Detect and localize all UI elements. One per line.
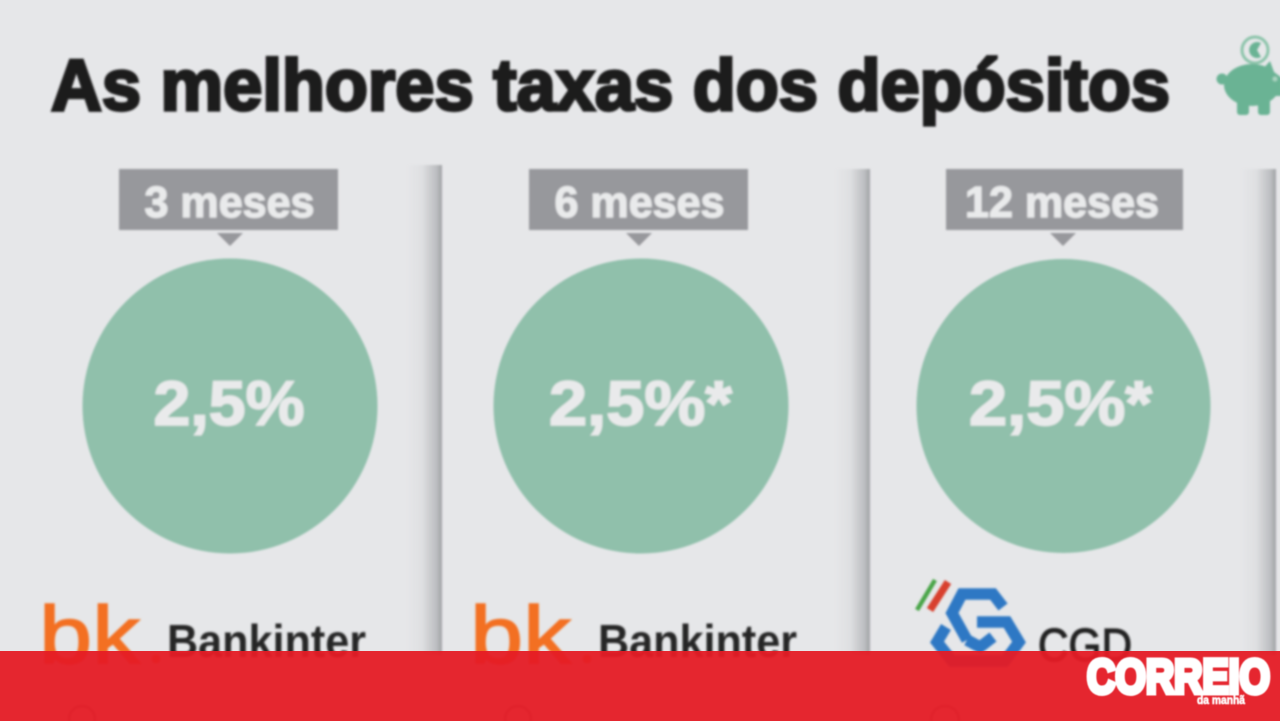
logo: Bankinter: Bankinter: [598, 615, 797, 667]
panel: 6 meses: [470, 169, 797, 681]
rate circle: 2,5%*: 2,5%*: [969, 369, 1153, 439]
period label: 3 meses: 3 meses: [144, 178, 314, 227]
logo: Bankinter: bk: [39, 590, 141, 681]
logo: Bankinter: Bankinter: [167, 615, 366, 667]
icon: piggy bank with coin: [1216, 37, 1280, 115]
period label: 12 meses: [946, 169, 1183, 246]
panel: column shadows: [406, 165, 1276, 655]
logo: Bankinter: bk: [470, 590, 572, 681]
logo: Correio da Manhã: da manhã: [1197, 695, 1246, 707]
rate circle: 2,5%*: [494, 258, 788, 554]
period label: 12 meses: 12 meses: [965, 178, 1159, 227]
period label: 3 meses: [119, 169, 338, 246]
rate circle: 2,5%*: 2,5%*: [549, 369, 733, 439]
period label: 6 meses: [529, 169, 748, 246]
footnote icons (hidden beneath banner): [69, 706, 959, 721]
logo: CGD: [917, 580, 1132, 671]
logo: CGD: CGD: [1038, 619, 1132, 671]
title: As melhores taxas dos depósitos: [51, 46, 1170, 126]
rate circle: 2,5%*: [916, 259, 1210, 553]
panel: 3 meses: [39, 169, 378, 681]
rate circle: 2,5%: 2,5%: [154, 369, 304, 439]
logo: Bankinter: [39, 590, 366, 681]
panel: 12 meses: [916, 169, 1210, 671]
footer banner: [0, 651, 1280, 721]
period label: 6 meses: 6 meses: [554, 178, 724, 227]
logo: Bankinter: [470, 590, 797, 681]
rate circle: 2,5%: [82, 258, 378, 554]
